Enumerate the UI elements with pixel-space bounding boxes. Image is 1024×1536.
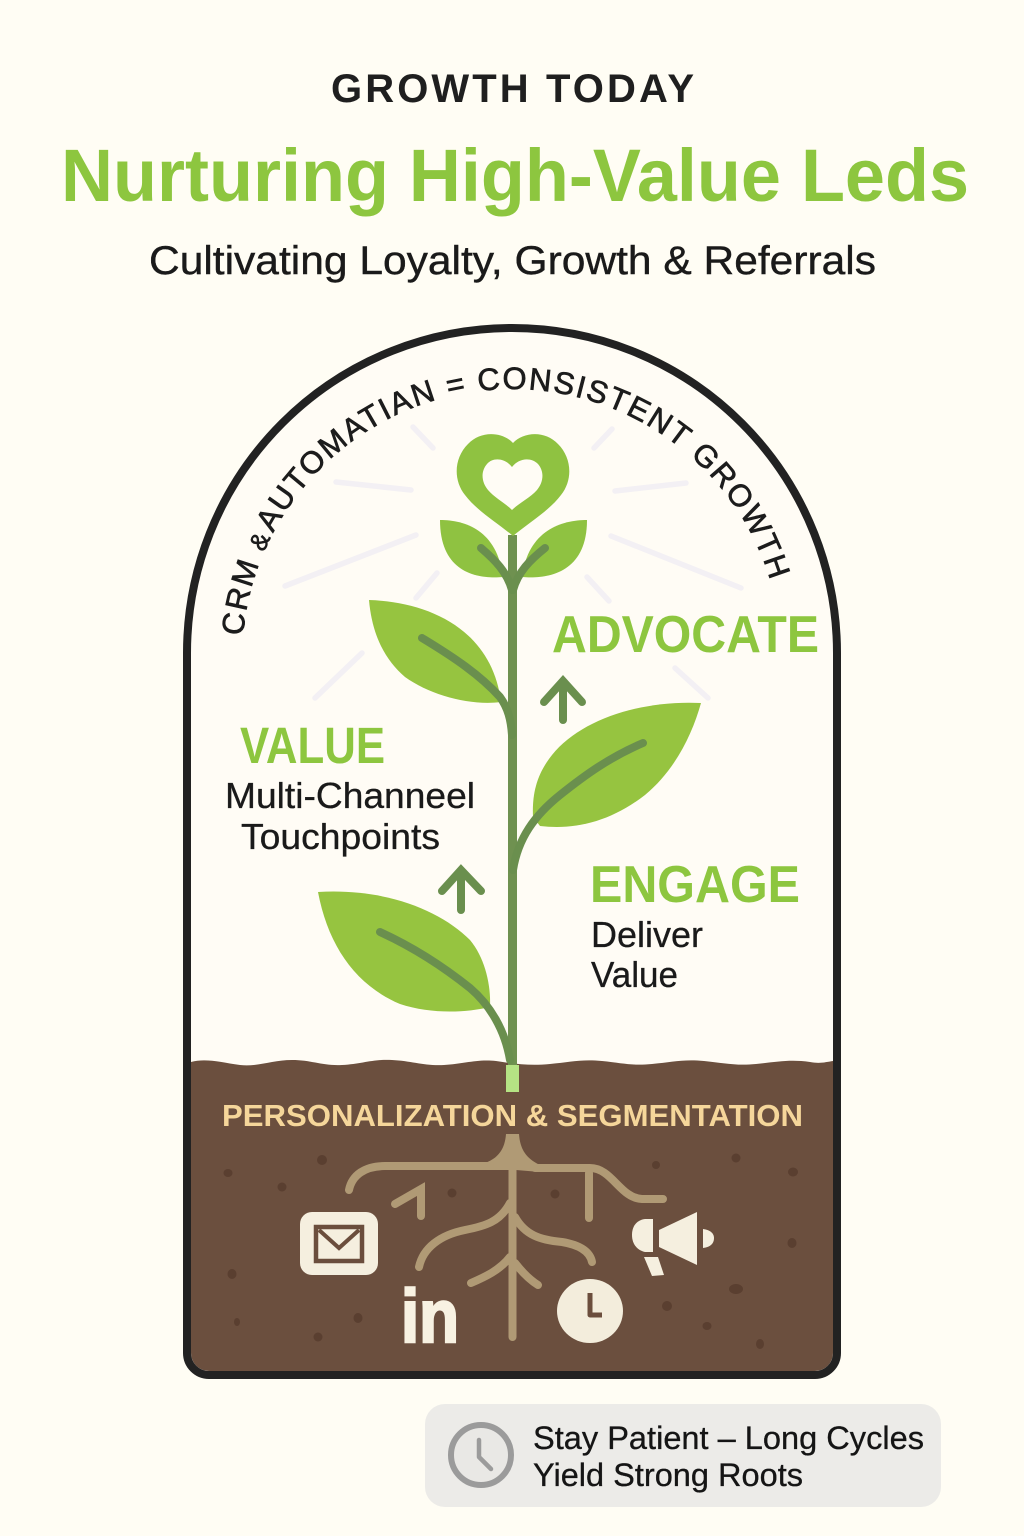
plant — [318, 434, 701, 1092]
callout: patience — [425, 1404, 941, 1507]
panel: arch — [187, 328, 837, 1375]
icon: megaphone — [632, 1212, 714, 1276]
icon: callout clock — [451, 1425, 511, 1485]
callout background — [425, 1404, 941, 1507]
leaf: top left — [440, 520, 503, 577]
label: engage: ENGAGE — [590, 856, 800, 914]
arrow: lower — [442, 870, 481, 910]
heart bud — [457, 434, 569, 536]
roots — [349, 1134, 663, 1337]
arch outline — [187, 328, 837, 1375]
label: value — [225, 717, 475, 857]
label: value: VALUE — [240, 717, 385, 774]
sun rays — [285, 427, 741, 698]
subtitle: Cultivating Loyalty, Growth & Referrals — [149, 239, 876, 283]
icon: mail — [300, 1212, 378, 1275]
label: value: Touchpoints — [241, 816, 440, 857]
root flare — [485, 1134, 540, 1180]
label: value: Multi-Channeel — [225, 775, 475, 816]
arch background — [187, 328, 837, 1375]
leaf: right — [533, 703, 701, 827]
callout text — [533, 1420, 924, 1493]
icon: clock — [557, 1279, 623, 1343]
icon: linkedin: in — [401, 1274, 459, 1358]
label: engage: Value — [591, 954, 678, 995]
callout text: Yield Strong Roots — [533, 1457, 803, 1493]
title: Nurturing High-Value Leds — [61, 134, 969, 217]
leaf: lower left — [318, 892, 490, 1012]
label: advocate: ADVOCATE — [552, 606, 819, 664]
stem veins — [380, 548, 643, 1060]
eyebrow heading: GROWTH TODAY — [331, 67, 694, 111]
soil specks — [224, 1154, 798, 1349]
stem — [508, 535, 517, 1066]
soil heading: PERSONALIZATION & SEGMENTATION — [222, 1098, 803, 1133]
leaf: top right — [522, 520, 587, 577]
curved banner text: CRM & AUTOMATIAN = CONSISTENT GROWTH — [222, 367, 790, 634]
soil — [191, 1060, 833, 1371]
sprout base — [506, 1065, 519, 1092]
label: engage: Deliver — [591, 914, 703, 955]
callout text: Stay Patient – Long Cycles — [533, 1420, 924, 1456]
leaf: upper left — [369, 600, 501, 703]
label: engage — [590, 856, 800, 995]
arrow: upper — [544, 681, 582, 720]
